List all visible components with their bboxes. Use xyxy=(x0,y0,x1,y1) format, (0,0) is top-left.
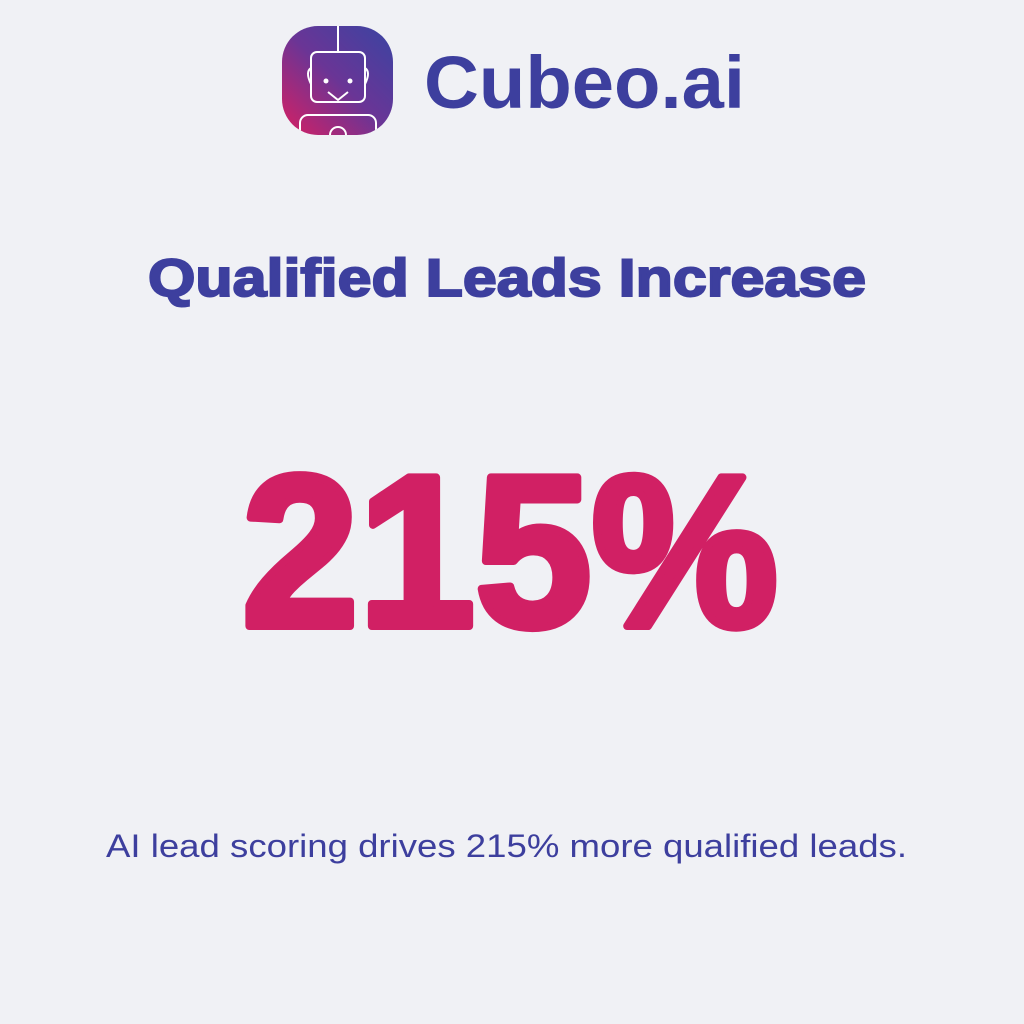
subtitle: AI lead scoring drives 215% more qualified leads. xyxy=(106,828,907,864)
logo text: Cubeo.ai xyxy=(424,41,745,124)
title: Qualified Leads Increase xyxy=(148,249,866,308)
big stat: 215% xyxy=(242,430,778,672)
icon: robot logo xyxy=(282,26,393,135)
